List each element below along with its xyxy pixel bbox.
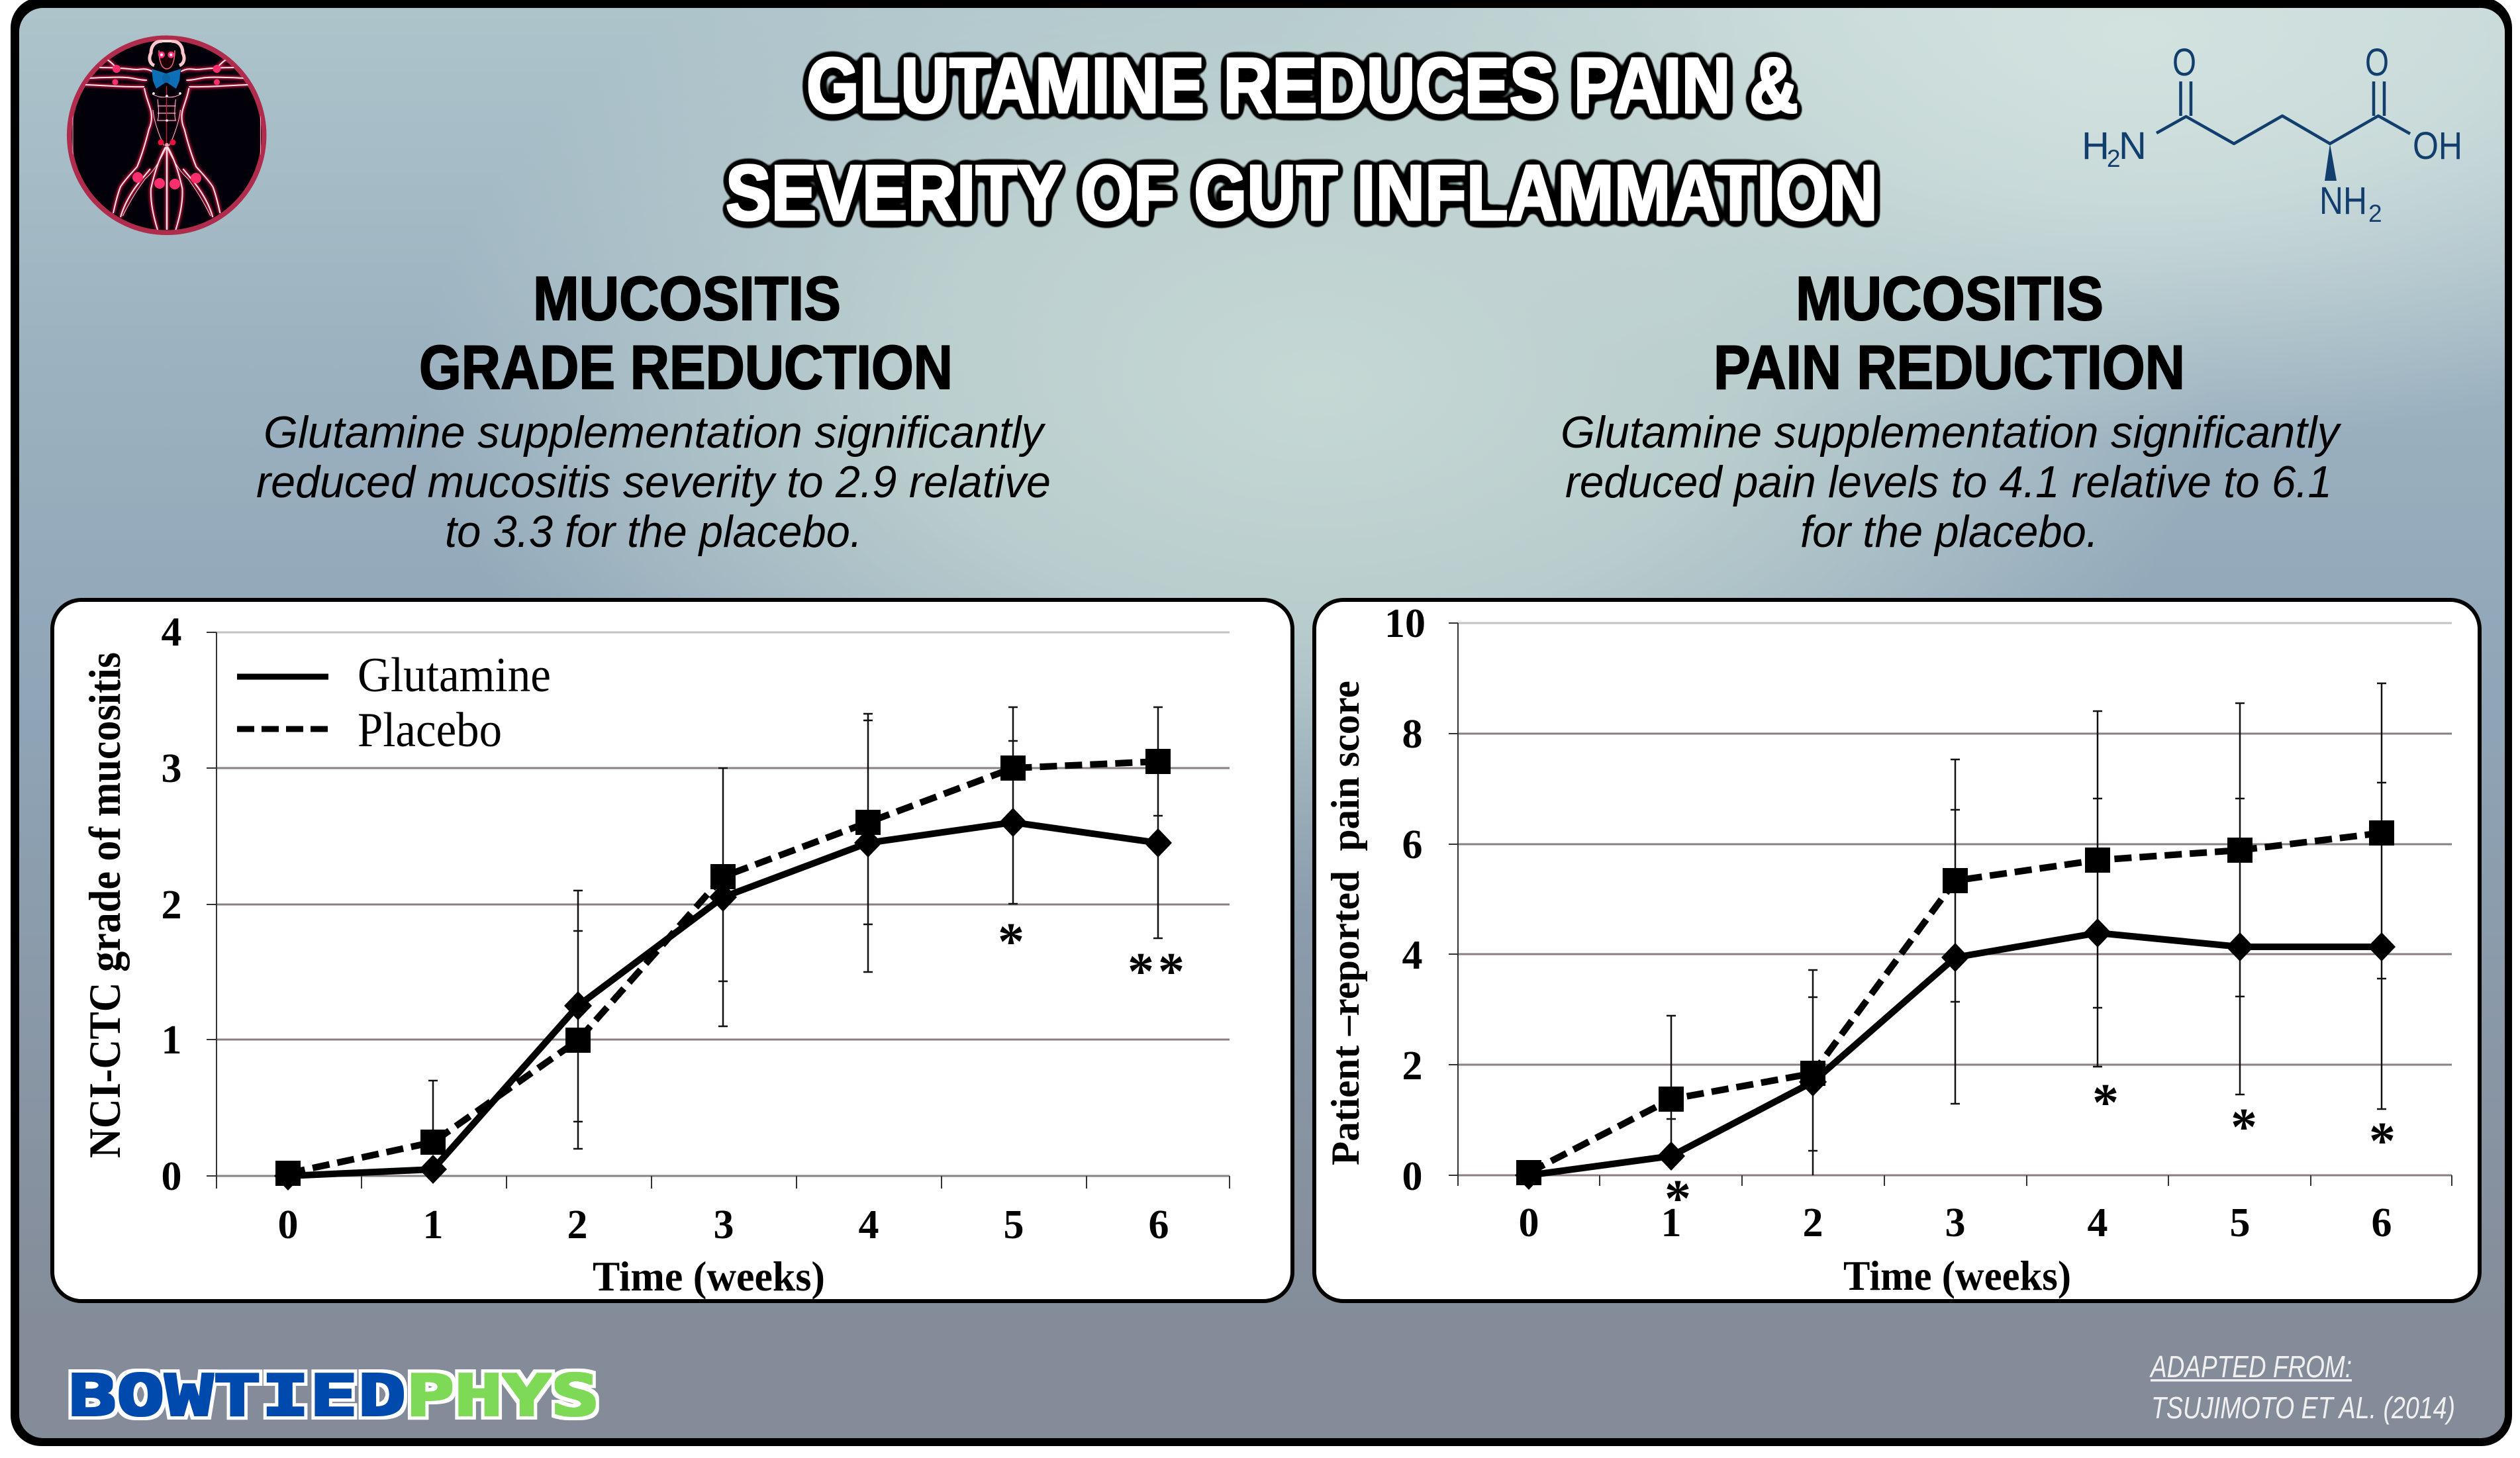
panel: right chart pain score xyxy=(1314,600,2480,1301)
y axis tick labels: 8 xyxy=(1402,712,1422,757)
significance asterisks xyxy=(998,913,1188,1001)
y axis tick labels: 1 xyxy=(162,1018,181,1063)
significance asterisks: * xyxy=(2369,1112,2396,1171)
icon: glutamine molecule xyxy=(2082,41,2462,227)
left heading xyxy=(419,264,953,402)
y axis tick labels: 2 xyxy=(162,883,181,928)
y axis title: Patient –reported pain score xyxy=(1324,681,1367,1165)
icon: glutamine molecule: OH xyxy=(2413,124,2462,168)
left description: to 3.3 for the placebo. xyxy=(445,507,862,557)
significance asterisks: ** xyxy=(1128,943,1188,1001)
placebo series xyxy=(1516,820,2394,1185)
left description: reduced mucositis severity to 2.9 relative xyxy=(256,457,1051,507)
y axis title: NCI-CTC grade of mucositis xyxy=(79,652,130,1158)
icon: glutamine molecule: H xyxy=(2082,124,2109,168)
glutamine series xyxy=(1515,918,2396,1190)
icon: glutamine molecule: 2 xyxy=(2107,145,2121,172)
source credit: TSUJIMOTO ET AL. (2014) xyxy=(2151,1390,2455,1425)
right description xyxy=(1561,407,2342,557)
error bars xyxy=(1667,683,2386,1175)
error bars xyxy=(428,707,1163,1149)
y axis tick labels xyxy=(1384,601,1426,1199)
gridlines and axes xyxy=(207,632,1230,1189)
placebo series xyxy=(275,749,1171,1186)
right description: Glutamine supplementation significantly xyxy=(1561,407,2342,458)
legend: Glutamine xyxy=(358,648,551,703)
source credit: ADAPTED FROM: xyxy=(2149,1349,2352,1384)
y axis tick labels: 2 xyxy=(1402,1044,1422,1089)
y axis tick labels: 4 xyxy=(1402,933,1422,978)
right heading: PAIN REDUCTION xyxy=(1714,332,2185,402)
right description: reduced pain levels to 4.1 relative to 6.1 xyxy=(1565,457,2332,507)
x axis tick labels: 4 xyxy=(2087,1200,2108,1245)
icon: glutamine molecule: N xyxy=(2119,124,2147,168)
glutamine series xyxy=(274,808,1172,1191)
left description xyxy=(256,407,1051,557)
icon: glutamine molecule: O xyxy=(2172,41,2196,84)
left heading: MUCOSITIS xyxy=(533,264,841,333)
title: SEVERITY OF GUT INFLAMMATION xyxy=(726,149,1878,237)
x axis tick labels: 3 xyxy=(1945,1200,1965,1245)
right heading xyxy=(1714,264,2185,402)
x axis tick labels: 2 xyxy=(567,1202,588,1247)
head with hair xyxy=(150,41,184,69)
x axis tick labels: 1 xyxy=(422,1202,444,1247)
icon: glutamine molecule: NH xyxy=(2319,179,2367,222)
x axis title: Time (weeks) xyxy=(1843,1252,2071,1299)
title: GLUTAMINE REDUCES PAIN & xyxy=(806,42,1798,130)
y axis tick labels: 4 xyxy=(162,610,181,655)
gridlines and axes xyxy=(1449,623,2452,1186)
legend xyxy=(237,648,551,757)
significance asterisks xyxy=(1665,1074,2396,1228)
x axis tick labels: 0 xyxy=(278,1202,298,1247)
x axis tick labels xyxy=(278,1202,1169,1247)
y axis tick labels: 3 xyxy=(162,746,181,791)
y axis tick labels: 10 xyxy=(1384,601,1426,646)
panel: left chart mucositis grade xyxy=(52,600,1292,1301)
x axis tick labels: 5 xyxy=(1004,1202,1024,1247)
significance asterisks: * xyxy=(1665,1170,1691,1228)
x axis tick labels: 5 xyxy=(2230,1200,2250,1245)
y axis tick labels: 0 xyxy=(1402,1154,1422,1199)
significance asterisks: * xyxy=(2231,1098,2257,1157)
icon: glutamine molecule: 2 xyxy=(2368,200,2382,227)
right heading: MUCOSITIS xyxy=(1796,264,2104,333)
left heading: GRADE REDUCTION xyxy=(419,332,953,402)
x axis tick labels xyxy=(1519,1200,2392,1245)
y axis tick labels: 0 xyxy=(162,1154,181,1199)
significance asterisks: * xyxy=(2092,1074,2119,1132)
x axis title: Time (weeks) xyxy=(593,1253,825,1300)
brand logo text: BOWTIED PHYS xyxy=(68,1363,599,1429)
x axis tick labels: 6 xyxy=(2372,1200,2392,1245)
significance asterisks: * xyxy=(998,913,1024,971)
y axis tick labels xyxy=(162,610,181,1199)
source credit xyxy=(2149,1349,2455,1425)
x axis tick labels: 1 xyxy=(1661,1200,1682,1245)
right description: for the placebo. xyxy=(1800,507,2098,557)
x axis tick labels: 6 xyxy=(1148,1202,1169,1247)
x axis tick labels: 4 xyxy=(858,1202,879,1247)
icon: vitruvian man logo xyxy=(70,38,264,232)
x axis tick labels: 2 xyxy=(1802,1200,1823,1245)
x axis tick labels: 0 xyxy=(1519,1200,1539,1245)
x axis tick labels: 3 xyxy=(714,1202,734,1247)
left description: Glutamine supplementation significantly xyxy=(264,407,1046,458)
icon: glutamine molecule: O xyxy=(2365,41,2389,84)
title xyxy=(726,42,1878,237)
legend: Placebo xyxy=(358,703,502,757)
y axis tick labels: 6 xyxy=(1402,822,1422,867)
